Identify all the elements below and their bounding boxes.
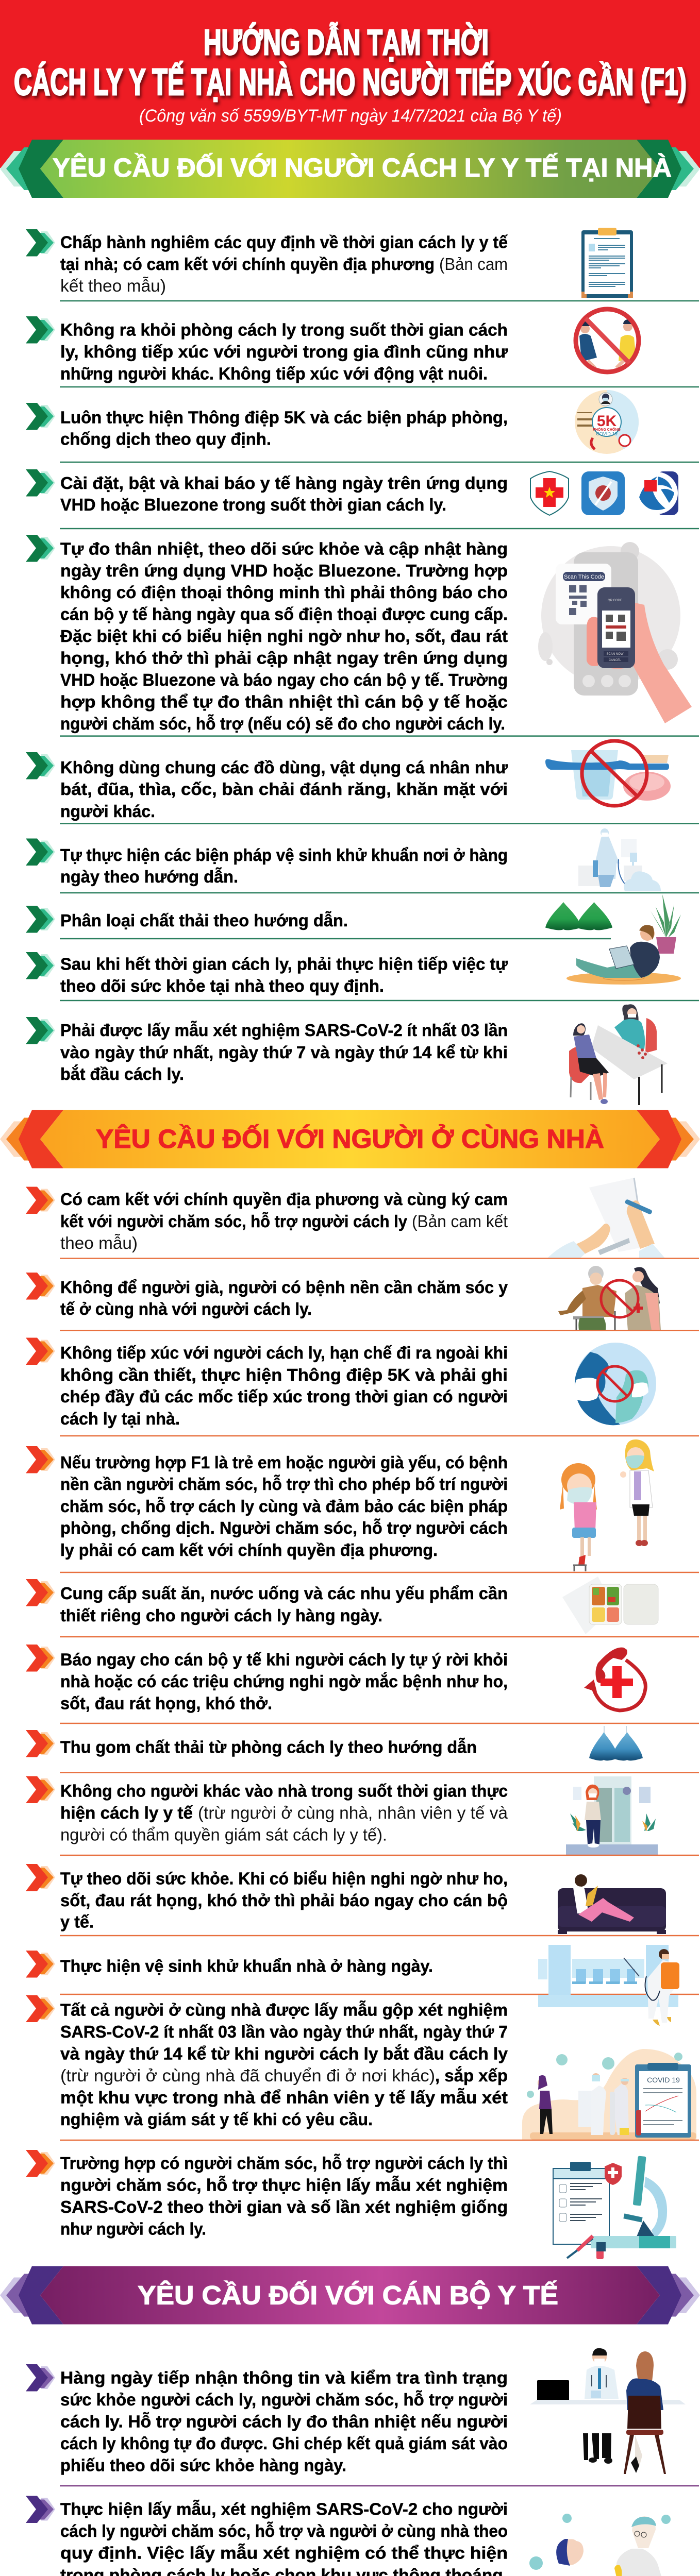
text block: Tự thực hiện các biện pháp vệ sinh khử khuẩn nơi ở hàng	[60, 845, 508, 865]
icon: clipboard	[581, 228, 633, 298]
divider	[60, 1994, 699, 1995]
text block: ngày trên ứng dụng VHD hoặc Bluezone. Trường hợp	[60, 561, 508, 580]
text block: bắt đầu cách ly.	[60, 1064, 184, 1083]
text block	[60, 320, 508, 383]
icon: green waste bags	[545, 902, 612, 930]
text block: chống dịch theo quy định.	[60, 430, 271, 449]
chevron	[26, 229, 55, 257]
item: khai báo y tế	[26, 469, 678, 515]
text block: chép đầy đủ các mốc tiếp xúc trong thời gian có người	[60, 1387, 508, 1406]
text block: không cần thiết, thực hiện Thông điệp 5K và phải ghi	[60, 1365, 508, 1384]
icon: phone scanning QR code: Scan This Code	[564, 574, 604, 580]
item: không ra khỏi phòng	[26, 309, 639, 383]
text block	[60, 1782, 508, 1844]
chevron	[26, 1995, 55, 2022]
chevron	[26, 403, 55, 430]
text block: sốt, đau rát họng, khó thở.	[60, 1694, 272, 1713]
text block	[60, 1650, 508, 1713]
item: người chăm sóc lấy mẫu	[26, 2150, 676, 2259]
text block: hiện cách ly y tế	[60, 1803, 193, 1822]
text block: Phân loại chất thải theo hướng dẫn.	[60, 911, 348, 930]
text block: kết theo mẫu)	[60, 276, 166, 295]
text block: nền cần người chăm sóc, hỗ trợ thì cho phép bố trí người	[60, 1475, 508, 1494]
heading banner: purple: YÊU CẦU ĐỐI VỚI CÁN BỘ Y TẾ	[138, 2280, 558, 2310]
subtitle: (Công văn số 5599/BYT-MT ngày 14/7/2021 của Bộ Y tế)	[139, 106, 562, 126]
item: báo ngay cho cán bộ y tế	[26, 1645, 645, 1713]
item: sau khi hết thời gian cách ly	[26, 894, 681, 995]
icon: food tray	[562, 1577, 658, 1634]
text block: người khác.	[60, 802, 155, 821]
text block: người có thẩm quyền giám sát cách ly y tế).	[60, 1825, 387, 1844]
text block: theo mẫu)	[60, 1233, 138, 1252]
text block: Không để người già, người có bệnh nền cần chăm sóc y	[60, 1278, 508, 1297]
text block	[60, 473, 508, 514]
icon: elderly in wheelchair	[558, 1266, 661, 1330]
text block	[60, 539, 508, 733]
text block: Tất cả người ở cùng nhà được lấy mẫu gộp xét nghiệm	[60, 2001, 508, 2020]
text block: thiết riêng cho người cách ly hàng ngày.	[60, 1606, 382, 1625]
icon: woman at door	[566, 1776, 658, 1855]
icon: medical staff and test report	[522, 2049, 696, 2140]
text block: VHD hoặc Bluezone và báo ngay cho cán bộ y tế. Trường	[60, 670, 508, 689]
text block: Báo ngay cho cán bộ y tế khi người cách ly tự ý rời khỏi	[60, 1650, 508, 1669]
panel: yêu cầu đối với cán bộ y tế	[0, 2266, 700, 2576]
text block: cách ly không tự đo được. Ghi chép kết quả giám sát vào	[60, 2434, 508, 2453]
heading banner: purple	[0, 2266, 700, 2325]
item: trẻ em, người già yếu	[26, 1439, 654, 1571]
text block: phòng, chống dịch. Người chăm sóc, hỗ trợ người cách	[60, 1518, 508, 1537]
heading banner: orange: YÊU CẦU ĐỐI VỚI NGƯỜI Ở CÙNG NHÀ	[96, 1124, 604, 1154]
text block: Cài đặt, bật và khai báo y tế hàng ngày trên ứng dụng	[60, 473, 508, 493]
text block: người chăm sóc, hỗ trợ thực hiện lấy mẫu xét nghiệm	[60, 2176, 508, 2195]
text block: Không ra khỏi phòng cách ly trong suốt thời gian cách	[60, 320, 508, 340]
text block: Nếu trường hợp F1 là trẻ em hoặc người già yếu, có bệnh	[60, 1453, 508, 1472]
icon: signing document	[547, 1178, 665, 1259]
heading banner: orange	[0, 1110, 700, 1168]
item: tất cả người ở cùng nhà lấy mẫu	[26, 1995, 696, 2140]
text block: Tự đo thân nhiệt, theo dõi sức khỏe và cập nhật hàng	[60, 539, 508, 558]
chevron	[26, 1951, 55, 1977]
text block: nghiệm và giám sát y tế khi có yêu cầu.	[60, 2110, 373, 2129]
text block: tế ở cùng nhà với người cách ly.	[60, 1299, 312, 1318]
text block: Đặc biệt khi có biểu hiện nghi ngờ như ho, sốt, đau rát	[60, 626, 508, 646]
text block: Hàng ngày tiếp nhận thông tin và kiểm tra tình trạng	[60, 2368, 508, 2387]
chevron	[26, 2496, 55, 2523]
text block: Phải được lấy mẫu xét nghiệm SARS-CoV-2 ít nhất 03 lần	[60, 1021, 508, 1040]
text block: chăm sóc, hỗ trợ cách ly cùng và đảm bảo các biện pháp	[60, 1497, 508, 1516]
chevron	[26, 1776, 55, 1803]
chevron	[26, 2364, 55, 2392]
text block: nhà hoặc có các triệu chứng nghi ngờ mắc bệnh như ho,	[60, 1672, 508, 1691]
text block: y tế.	[60, 1912, 94, 1931]
text block	[60, 1190, 508, 1252]
text block: hợp không thể tự đo thân nhiệt thì cán bộ y tế hoặc	[60, 692, 508, 711]
chevron	[26, 1645, 55, 1671]
heading banner: green: YÊU CẦU ĐỐI VỚI NGƯỜI CÁCH LY Y TẾ TẠI NHÀ	[53, 152, 672, 182]
text block	[60, 1278, 508, 1318]
chevron	[26, 1187, 55, 1214]
icon: medical staff and test report: COVID 19	[647, 2076, 680, 2084]
title	[14, 22, 687, 103]
chevron	[26, 1579, 55, 1606]
text block: cán bộ y tế hàng ngày qua số điện thoại được cung cấp.	[60, 605, 508, 624]
icon: phone scanning QR code: CANCEL	[609, 659, 622, 662]
panel: yêu cầu đối với người ở cùng nhà	[0, 1110, 700, 2259]
text block: Thực hiện lấy mẫu, xét nghiệm SARS-CoV-2 cho người	[60, 2500, 508, 2519]
text block: tại nhà; có cam kết với chính quyền địa phương	[60, 255, 435, 274]
chevron	[26, 469, 55, 497]
chevron	[26, 2150, 55, 2177]
chevron	[26, 906, 55, 933]
text block	[60, 954, 508, 995]
item: thu gom chất thải	[26, 1726, 643, 1760]
item: cung cấp suất ăn	[26, 1577, 658, 1634]
text block	[60, 2500, 508, 2576]
icon: app logos	[530, 471, 678, 515]
text block: ly phải có cam kết với chính quyền địa phương.	[60, 1540, 438, 1560]
panel: yêu cầu đối với người cách ly y tế tại nhà	[0, 140, 700, 1105]
panel: header	[0, 0, 700, 168]
item: không cho người khác vào nhà	[26, 1776, 658, 1855]
icon: phone scanning QR code	[538, 542, 692, 723]
text block: phiếu theo dõi sức khỏe hàng ngày.	[60, 2456, 346, 2475]
text block: bát, đũa, thìa, cốc, bàn chải đánh răng, khăn mặt với	[60, 779, 508, 799]
text block: Thực hiện vệ sinh khử khuẩn nhà ở hàng ngày.	[60, 1957, 433, 1975]
text block: kết với người chăm sóc, hỗ trợ người cách ly	[60, 1212, 408, 1231]
text block: Không cho người khác vào nhà trong suốt thời gian thực	[60, 1782, 508, 1800]
item: lấy mẫu xét nghiệm	[26, 1004, 668, 1105]
text block: (trừ người ở cùng nhà đã chuyển đi ở nơi khác)	[60, 2066, 435, 2085]
text block	[60, 758, 508, 821]
text block: ly, không tiếp xúc với người trong gia đình cũng như	[60, 342, 508, 361]
chevron	[26, 1017, 55, 1044]
chevron	[26, 952, 55, 979]
item: vệ sinh khử khuẩn nhà ở	[26, 1945, 699, 2026]
text block: VHD hoặc Bluezone trong suốt thời gian cách ly.	[60, 495, 446, 514]
icon: person spraying a room	[538, 1945, 679, 2026]
icon: 5K circle	[575, 390, 639, 454]
text block: quy định. Việc lấy mẫu xét nghiệm có thể thực hiện	[60, 2544, 508, 2563]
text block	[60, 233, 508, 295]
icon: emergency call ring	[584, 1648, 645, 1710]
text block: (Bản cam kết	[412, 1212, 508, 1231]
text block: ngày theo hướng dẫn.	[60, 867, 238, 886]
icon: masked faces, no contact	[574, 1343, 656, 1425]
text block: cách ly tại nhà.	[60, 1409, 180, 1428]
text block: Thu gom chất thải từ phòng cách ly theo hướng dẫn	[60, 1737, 477, 1757]
text block	[60, 1869, 508, 1931]
icon: doctor consultation	[530, 2348, 686, 2474]
text block: một khu vực trong nhà để nhân viên y tế lấy mẫu xét	[60, 2088, 508, 2107]
text block: , sắp xếp	[435, 2066, 508, 2085]
item: không dùng chung đồ dùng	[26, 741, 671, 821]
text block: (Bản cam	[439, 255, 508, 274]
text block	[60, 2001, 508, 2129]
text block	[60, 408, 508, 449]
text block: không có điện thoại thông minh thì phải thông báo cho	[60, 583, 508, 602]
text block: người chăm sóc, hỗ trợ (nếu có) sẽ đo cho người cách ly.	[60, 714, 505, 733]
chevron	[26, 1446, 55, 1473]
icon: nose swab test	[527, 2514, 682, 2576]
chevron	[26, 1730, 55, 1757]
text block: cách ly. Hỗ trợ người cách ly đo thân nhiệt nếu người	[60, 2412, 508, 2431]
text block: Chấp hành nghiêm các quy định về thời gian cách ly y tế	[60, 233, 508, 252]
item: thông điệp 5K	[26, 390, 639, 454]
text block: Sau khi hết thời gian cách ly, phải thực hiện tiếp việc tự	[60, 954, 508, 974]
text block: vào ngày thứ nhất, ngày thứ 7 và ngày thứ 14 kể từ khi	[60, 1043, 508, 1062]
chevron	[26, 752, 55, 779]
text block: những người khác. Không tiếp xúc với động vật nuôi.	[60, 364, 488, 383]
text block: cách ly người chăm sóc, hỗ trợ và người ở cùng nhà theo	[60, 2521, 508, 2540]
item: tự đo thân nhiệt	[26, 535, 692, 733]
text block: họng, khó thở thì phải cập nhật ngay trên ứng dụng	[60, 649, 508, 668]
text block: theo dõi sức khỏe tại nhà theo quy định.	[60, 976, 384, 995]
chevron	[26, 535, 55, 562]
icon: nurse taking sample	[569, 1004, 668, 1105]
text block: Có cam kết với chính quyền địa phương và cùng ký cam	[60, 1190, 508, 1209]
text block: Không dùng chung các đồ dùng, vật dụng cá nhân như	[60, 758, 508, 777]
icon: no sharing of personal items	[545, 741, 671, 806]
icon: child and doctor	[560, 1439, 654, 1571]
text block	[60, 1021, 508, 1083]
icon: phone scanning QR code: QR CODE	[608, 599, 622, 602]
text block: và ngày thứ 14 kể từ khi người cách ly bắt đầu cách ly	[60, 2044, 508, 2063]
chevron	[26, 1273, 55, 1299]
icon: clipboard and microscope	[553, 2156, 676, 2259]
text block: Tự theo dõi sức khỏe. Khi có biểu hiện nghi ngờ như ho,	[60, 1869, 508, 1888]
icon: no contact sign	[576, 309, 639, 372]
icon: 5K circle: PHÒNG CHỐNG	[593, 427, 621, 432]
text block: (trừ người ở cùng nhà, nhân viên y tế và	[198, 1803, 508, 1822]
text block: Luôn thực hiện Thông điệp 5K và các biện pháp phòng,	[60, 408, 508, 427]
text block: SARS-CoV-2 theo thời gian và số lần xét nghiệm giống	[60, 2197, 508, 2216]
item: tiếp nhận thông tin	[26, 2348, 686, 2475]
item: có cam kết	[26, 1178, 665, 1259]
chevron	[26, 1864, 55, 1891]
chevron	[26, 839, 55, 866]
text block	[60, 1584, 508, 1625]
icon: blue waste bags	[589, 1726, 643, 1760]
text block	[60, 2368, 508, 2475]
item: lấy mẫu, xét nghiệm	[26, 2496, 682, 2576]
icon: phone scanning QR code: SCAN NOW	[606, 653, 624, 656]
text block: sức khỏe người cách ly, người chăm sóc, hỗ trợ người	[60, 2390, 508, 2409]
icon: 5K circle: 5K	[597, 413, 617, 430]
text block: SARS-CoV-2 ít nhất 03 lần vào ngày thứ nhất, ngày thứ 7	[60, 2022, 508, 2041]
icon: person disinfecting	[578, 828, 661, 891]
heading banner: green	[0, 140, 700, 198]
chevron	[26, 316, 55, 343]
item: không tiếp xúc	[26, 1337, 656, 1428]
chevron	[26, 1337, 55, 1365]
text block: sốt, đau rát họng, khó thở thì phải báo ngay cho cán bộ	[60, 1891, 508, 1910]
text block	[60, 1453, 508, 1560]
item: chấp hành quy định	[26, 228, 633, 298]
text block	[60, 1343, 508, 1428]
text block: như người cách ly.	[60, 2219, 206, 2239]
text block	[60, 845, 508, 886]
text block: Trường hợp có người chăm sóc, hỗ trợ người cách ly thì	[60, 2154, 508, 2173]
item: vệ sinh khử khuẩn	[26, 828, 661, 891]
item: phân loại chất thải	[26, 902, 612, 933]
text block: Không tiếp xúc với người cách ly, hạn chế đi ra ngoài khi	[60, 1343, 508, 1362]
icon: person on couch	[558, 1874, 666, 1934]
title: HƯỚNG DẪN TẠM THỜI	[204, 22, 489, 62]
icon: 5K circle: COVID-19	[596, 431, 618, 436]
item: tự theo dõi sức khỏe	[26, 1864, 666, 1934]
icon: man with laptop and plant	[566, 894, 681, 985]
item: không để người già	[26, 1266, 661, 1330]
text block: Cung cấp suất ăn, nước uống và các nhu yếu phẩm cần	[60, 1584, 508, 1603]
text block	[60, 2154, 508, 2239]
